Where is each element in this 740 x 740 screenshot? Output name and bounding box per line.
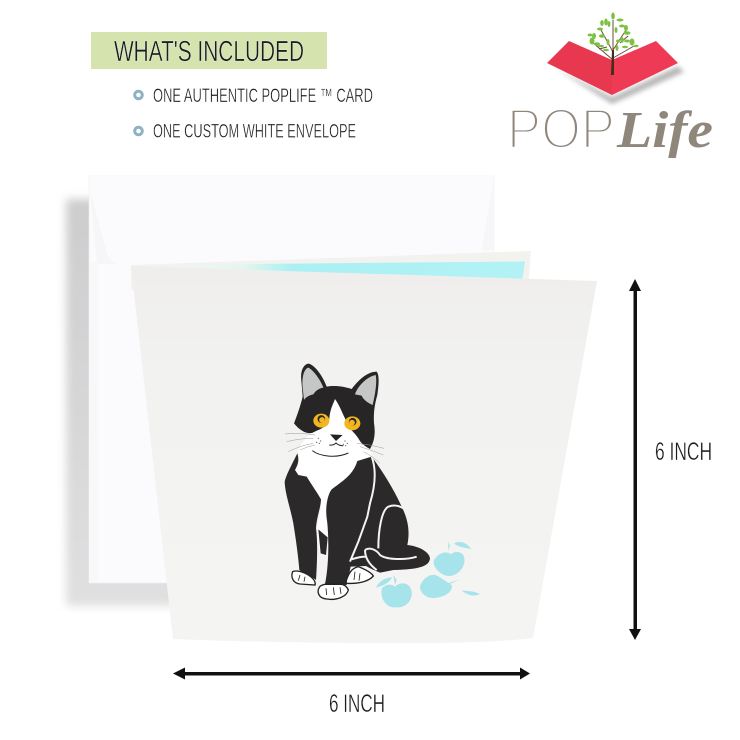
logo: poplife bbox=[507, 12, 713, 161]
illustration: tuxedo cat with apples bbox=[285, 364, 480, 607]
icon: bullet two bbox=[135, 127, 142, 135]
cat white chest and muzzle bbox=[295, 397, 372, 557]
vertical dimension label: 6 INCH bbox=[655, 438, 712, 466]
cat head bbox=[285, 364, 384, 463]
blue card interior bbox=[193, 262, 525, 282]
wordmark: pop: POP bbox=[507, 97, 615, 161]
heading: what's included bbox=[91, 32, 327, 69]
envelope flap bbox=[89, 176, 494, 263]
heading: what's included: WHAT'S INCLUDED bbox=[114, 36, 304, 68]
envelope bbox=[89, 176, 494, 583]
cat whiskers bbox=[285, 433, 384, 463]
pop-up card front bbox=[131, 266, 597, 643]
vertical dimension arrow bbox=[629, 279, 641, 640]
cat left leg bbox=[285, 453, 321, 580]
icon: tree bbox=[588, 12, 638, 75]
text: white envelope: ONE CUSTOM WHITE ENVELOPE bbox=[153, 122, 356, 142]
text: authentic card: ONE AUTHENTIC POPLIFE ™ CARD bbox=[153, 86, 373, 107]
cat body and tail bbox=[325, 457, 430, 585]
cat gap between legs bbox=[318, 529, 328, 555]
icon: bullet one bbox=[135, 91, 142, 99]
envelope shadow bbox=[66, 199, 176, 606]
icon: red open book bbox=[547, 41, 678, 95]
horizontal dimension arrow bbox=[173, 668, 530, 680]
apples bbox=[376, 542, 480, 607]
cat paws bbox=[292, 567, 373, 599]
cat nose and mouth bbox=[312, 434, 348, 456]
cat eyes bbox=[313, 414, 360, 430]
wordmark: life: Life bbox=[616, 102, 713, 159]
cat white outline lines bbox=[350, 457, 417, 570]
horizontal dimension label: 6 INCH bbox=[329, 690, 385, 718]
logo shadow bbox=[555, 66, 684, 104]
card back panel bbox=[131, 251, 531, 290]
cat ears bbox=[302, 368, 376, 405]
list: included items bbox=[135, 86, 373, 142]
